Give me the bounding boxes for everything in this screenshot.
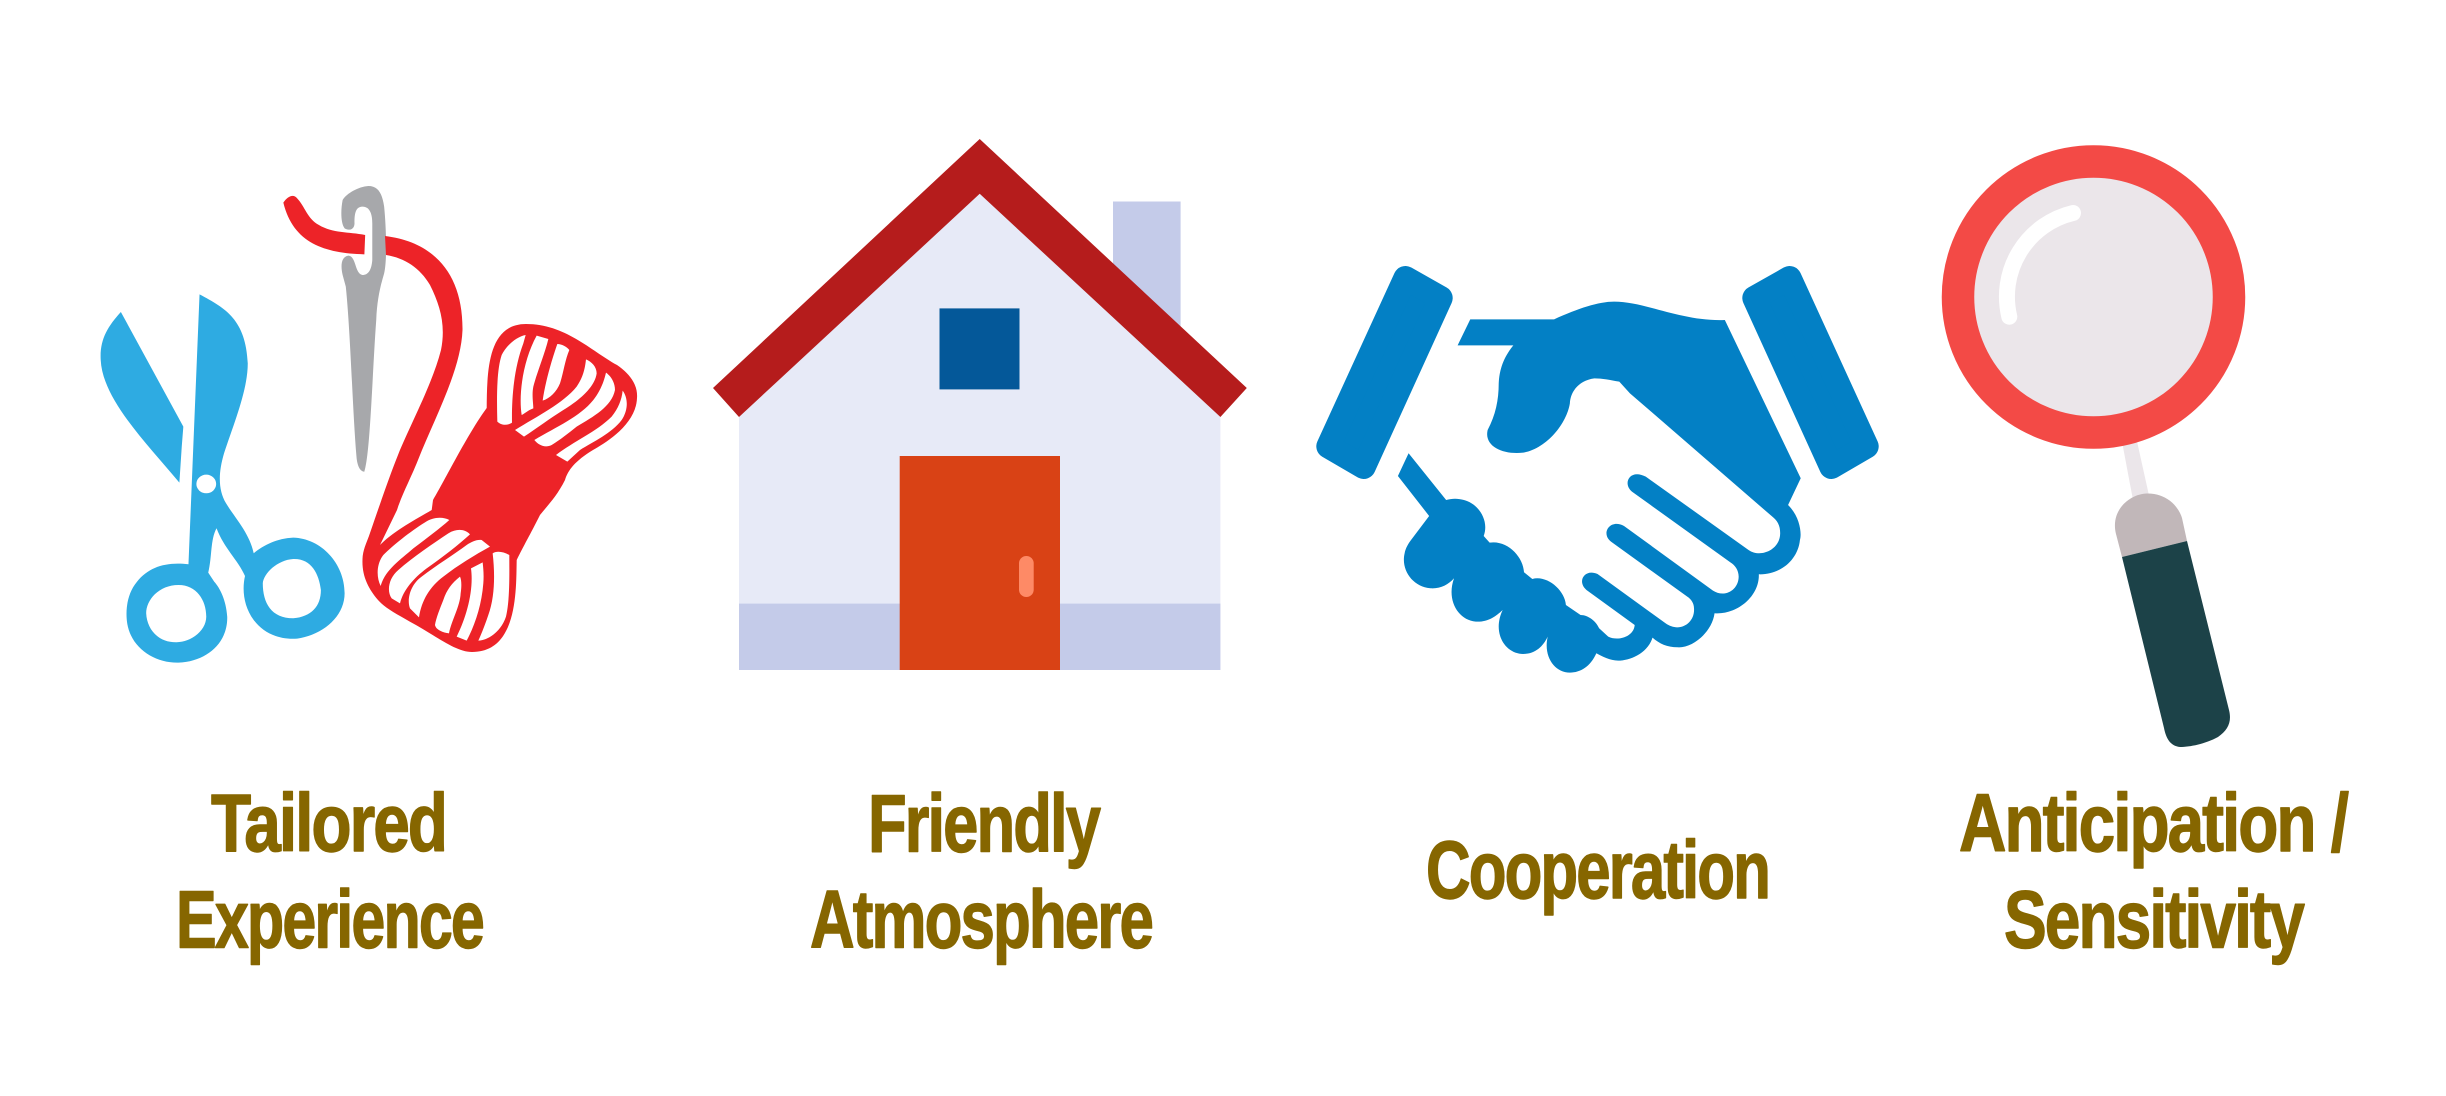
icon: needle and thread skein [283, 186, 637, 652]
label: Friendly Atmosphere: Friendly [868, 778, 1101, 870]
icon: magnifying glass [1958, 162, 2230, 747]
label: Tailored Experience: Tailored [211, 778, 446, 869]
icon: house [713, 139, 1247, 670]
label: Cooperation: Cooperation [1426, 825, 1769, 916]
icon: handshake [1328, 278, 1867, 673]
icon: scissors [101, 294, 345, 663]
label: Friendly Atmosphere: Atmosphere [810, 874, 1152, 966]
label: Anticipation / Sensitivity: Sensitivity [2004, 874, 2305, 966]
label: Tailored Experience: Experience [176, 874, 483, 966]
label: Anticipation / Sensitivity: Anticipation / [1959, 778, 2348, 869]
label: Friendly Atmosphere [810, 778, 1152, 966]
label: Tailored Experience [176, 778, 483, 966]
label: Anticipation / Sensitivity [1959, 778, 2348, 966]
